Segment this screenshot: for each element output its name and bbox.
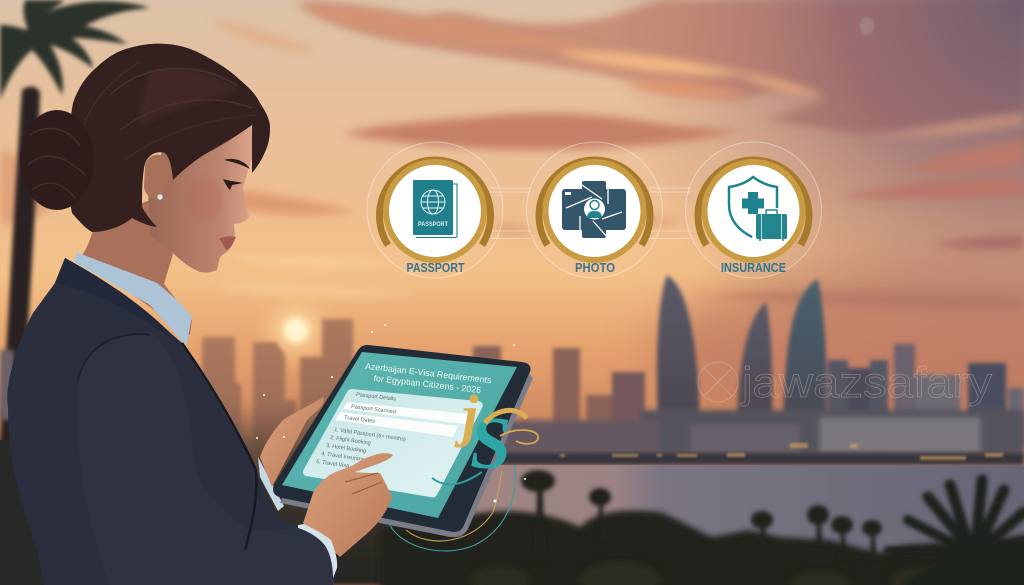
- lens flare spot: [860, 17, 874, 35]
- watermark logo: [698, 362, 738, 402]
- city skyline: [202, 275, 1024, 462]
- eye and brow: [223, 159, 250, 190]
- hand on left of tablet: [260, 397, 324, 487]
- lapel edge: [182, 343, 256, 550]
- form fields: [335, 402, 470, 437]
- shoreline with city lights: [340, 443, 1024, 465]
- left dark ground behind the woman: [230, 400, 472, 585]
- swirl lines: [388, 430, 538, 551]
- tablet title text: for Egyptian Citizens - 2026: [373, 373, 482, 395]
- shirt placket: [258, 457, 284, 511]
- icon: passport book: PASSPORT: [418, 221, 448, 228]
- tablet body: [273, 345, 531, 532]
- jacket collar shading: [55, 258, 182, 345]
- tablet title text: Azerbaijan E-Visa Requirements: [365, 361, 493, 385]
- form text: Travel Dates: [344, 415, 375, 425]
- foreground palm trees: [380, 470, 1024, 585]
- shirt collar: [74, 252, 192, 346]
- woman: [7, 44, 337, 585]
- flame towers: [657, 275, 827, 428]
- tablet screen: [282, 352, 517, 518]
- cuff: [298, 524, 337, 578]
- label: passport: PASSPORT: [406, 260, 465, 275]
- form text: 1. Valid Passport (6+ months): [334, 427, 406, 443]
- form text: 4. Travel Insurance: [321, 451, 368, 463]
- dark ground at far left: [0, 440, 45, 585]
- icon badge: insurance: [686, 142, 822, 278]
- face: [148, 122, 253, 273]
- icon badge: passport: [367, 142, 503, 278]
- letter j: j: [454, 383, 479, 448]
- hair: [68, 44, 270, 232]
- sparkles: [256, 324, 526, 502]
- neck: [80, 200, 192, 335]
- sun: [250, 284, 342, 376]
- jacket: [7, 258, 337, 585]
- cheek blush: [187, 178, 223, 222]
- sleeve: [77, 334, 337, 585]
- label: insurance: INSURANCE: [721, 260, 786, 275]
- gold swash: [485, 410, 527, 423]
- jacket fold: [78, 334, 150, 380]
- watermark text: jawazsafary: [740, 359, 993, 407]
- lips: [219, 236, 236, 250]
- pointing hand: [303, 453, 393, 557]
- left palm tree: [0, 0, 150, 585]
- connectors between icons: [490, 188, 690, 238]
- letter s: S: [470, 403, 511, 485]
- icon badge: photo: [526, 142, 662, 278]
- form text: 3. Hotel Booking: [326, 443, 367, 455]
- water: [440, 465, 1024, 560]
- ear: [144, 155, 170, 200]
- tablet: [273, 345, 533, 537]
- earring: [157, 194, 163, 200]
- label: photo: PHOTO: [575, 260, 615, 275]
- form text: [316, 392, 406, 470]
- portrait: [590, 200, 599, 210]
- tablet form panel: [303, 389, 483, 497]
- form text: Passport Details: [356, 392, 396, 403]
- hair highlights: [82, 62, 256, 160]
- form text: 5. Travel Visa: [316, 459, 350, 470]
- form text: Passport Scanned: [351, 404, 396, 415]
- icon: camera aperture: [562, 181, 626, 238]
- form text: 2. Flight Booking: [330, 435, 371, 447]
- hair bun: [20, 110, 94, 210]
- watermark: jawazsafary: [698, 359, 993, 407]
- large right palm: [888, 480, 1024, 585]
- icon: shield with suitcase: [729, 177, 787, 241]
- js logo: [256, 324, 538, 551]
